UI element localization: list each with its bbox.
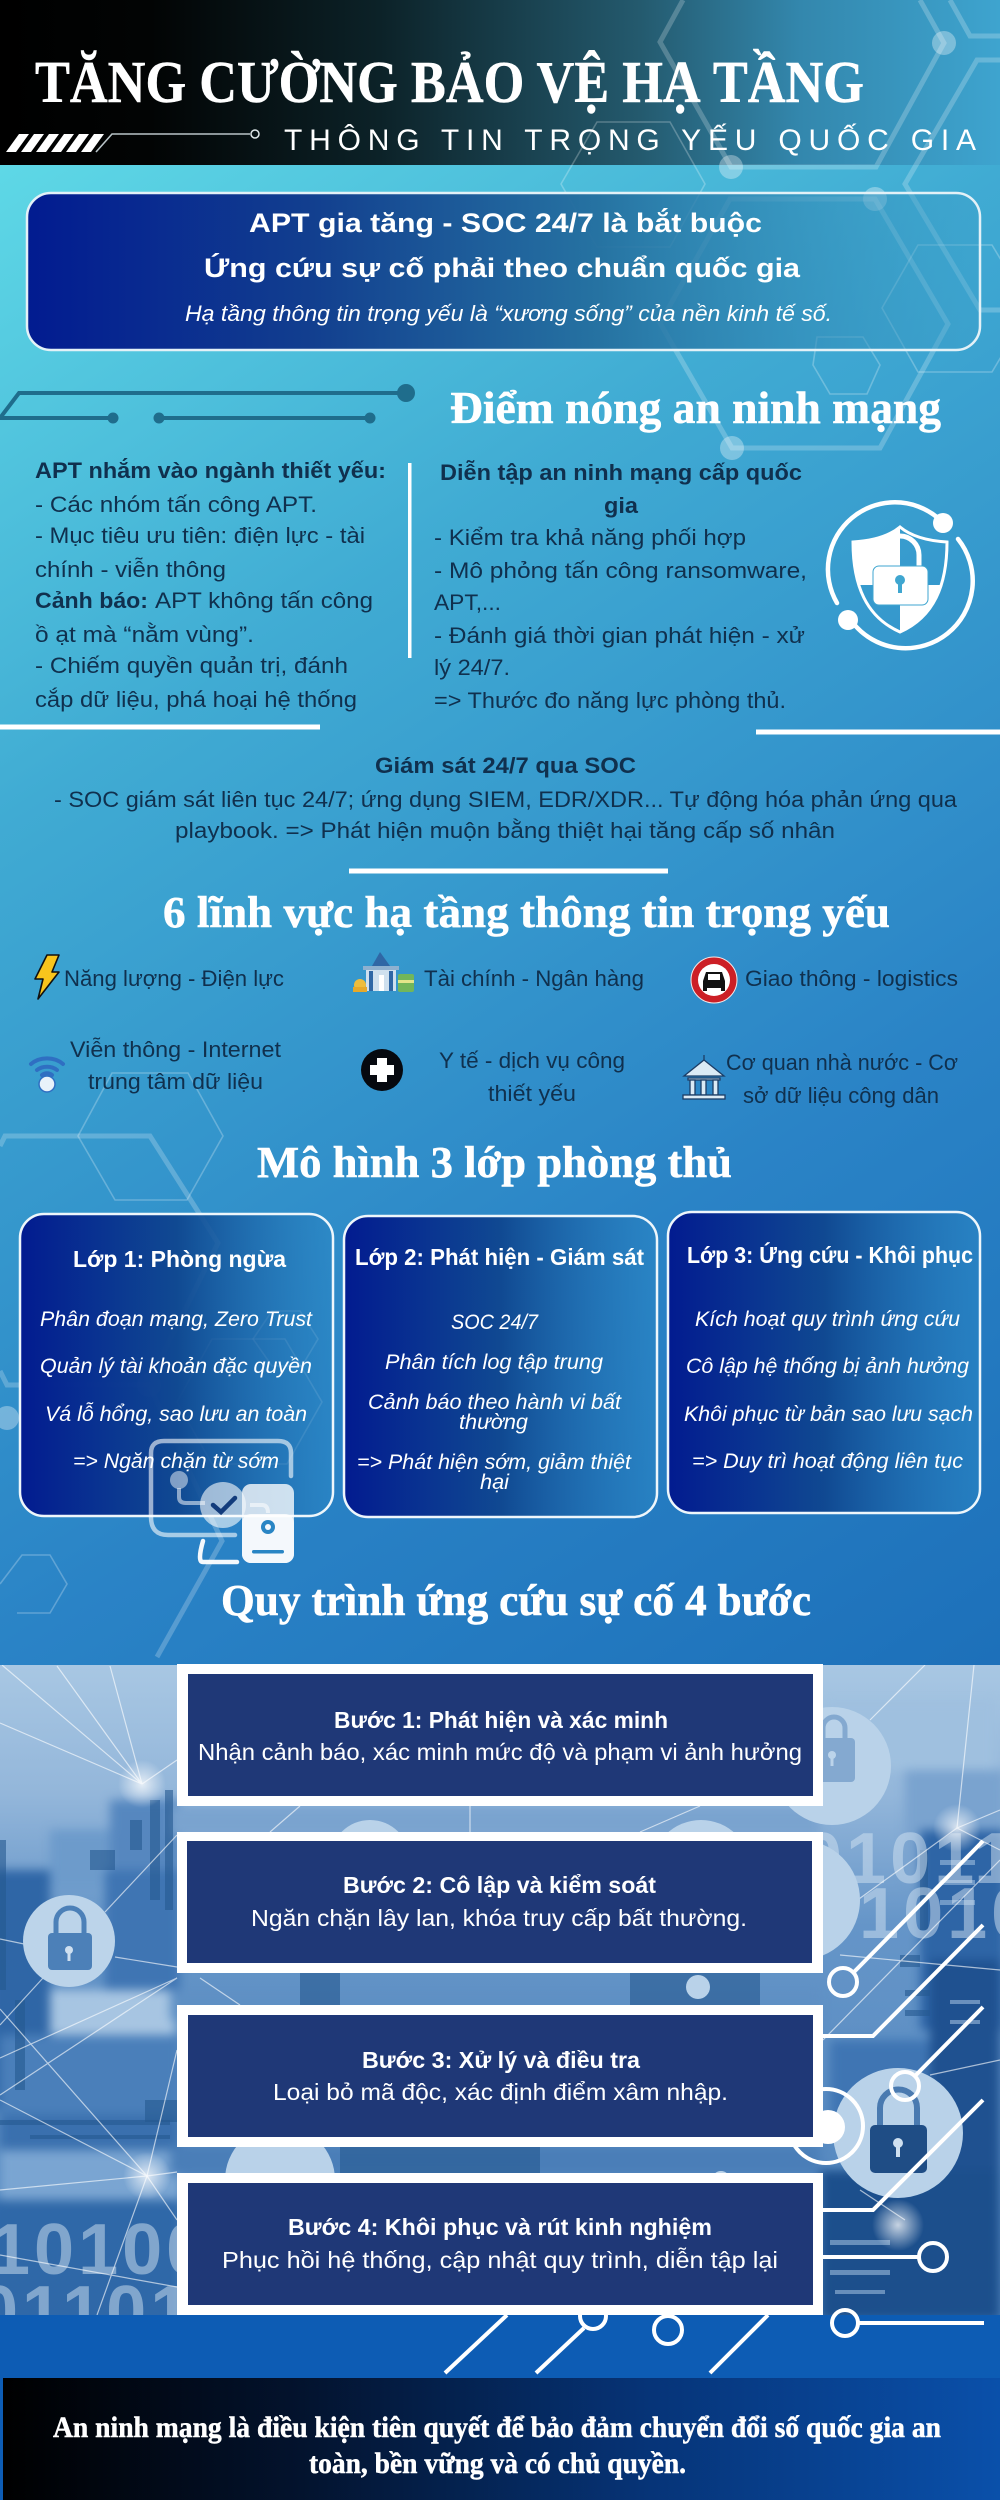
heading: 3-layer model: Mô hình 3 lớp phòng thủ [257, 1138, 732, 1187]
photo textures [0, 1790, 930, 2173]
icon: medical cross [361, 1049, 403, 1091]
sector: telecom: trung tâm dữ liệu [88, 1069, 263, 1094]
text block: national drill: - Đánh giá thời gian phát hiện - xử [434, 623, 805, 648]
sector: finance: Tài chính - Ngân hàng [424, 966, 644, 991]
text block: national drill: APT,... [434, 590, 501, 615]
step 2 [177, 1832, 823, 1973]
text block: APT: - Chiếm quyền quản trị, đánh [35, 653, 348, 678]
icon: lightning bolt [35, 955, 59, 999]
panel: layer 3: Khôi phục từ bản sao lưu sạch [684, 1403, 973, 1426]
heading: hotspots: Điểm nóng an ninh mạng [450, 382, 941, 433]
icon: wifi and globe [31, 1058, 63, 1092]
panel: layer 2: Lớp 2: Phát hiện - Giám sát [355, 1244, 644, 1270]
photo lock top right [823, 1714, 855, 1782]
step 1: Nhận cảnh báo, xác minh mức độ và phạm vi ảnh hưởng [198, 1739, 802, 1765]
background hexagon network: top right [561, 0, 1000, 460]
step 3: Bước 3: Xử lý và điều tra [362, 2047, 640, 2073]
text block: SOC monitoring [54, 753, 958, 843]
header subtitle: THÔNG TIN TRỌNG YẾU QUỐC GIA [284, 123, 976, 157]
sector: government [683, 1050, 958, 1108]
text block: APT: - Các nhóm tấn công APT. [35, 492, 317, 517]
text block: APT: Cảnh báo: [35, 588, 148, 613]
panel: layer 3: Kích hoạt quy trình ứng cứu [695, 1308, 960, 1331]
sector: government: sở dữ liệu công dân [743, 1083, 939, 1108]
step 3: Loại bỏ mã độc, xác định điểm xâm nhập. [273, 2079, 728, 2105]
panel: layer 3: Lớp 3: Ứng cứu - Khôi phục [687, 1241, 973, 1268]
text block: national drill: Diễn tập an ninh mạng cấp quốc [440, 460, 802, 485]
step 4 [177, 2173, 823, 2315]
text block: national drill: - Kiểm tra khả năng phối hợp [434, 525, 746, 550]
lower blue band [0, 2315, 1000, 2500]
footer banner: An ninh mạng là điều kiện tiên quyết để bảo đảm chuyển đổi số quốc gia an [53, 2411, 941, 2444]
header decoration: stripes and line [6, 130, 259, 152]
panel: layer 1 [20, 1214, 333, 1516]
text block: national drill: - Mô phỏng tấn công ransomware, [434, 558, 807, 583]
text block: APT [35, 458, 386, 712]
panel: layer 2: thường [459, 1411, 528, 1434]
text block: APT: APT không tấn công [155, 588, 373, 613]
panel: layer 2: => Phát hiện sớm, giảm thiệt [357, 1451, 632, 1474]
panel: layer 2: Cảnh báo theo hành vi bất [368, 1391, 622, 1414]
panel: layer 1: Vá lỗ hổng, sao lưu an toàn [45, 1403, 307, 1426]
panel: layer 2: SOC 24/7 [451, 1311, 539, 1334]
intro line 2: Ứng cứu sự cố phải theo chuẩn quốc gia [204, 252, 801, 283]
panel: layer 1: Lớp 1: Phòng ngừa [73, 1246, 286, 1272]
step 1: Bước 1: Phát hiện và xác minh [334, 1707, 668, 1733]
text block: national drill [434, 460, 807, 713]
icon: bank with coins [353, 952, 414, 992]
sector: government: Cơ quan nhà nước - Cơ [726, 1050, 958, 1075]
header title: TĂNG CƯỜNG BẢO VỆ HẠ TẦNG [35, 49, 864, 115]
network lines [0, 1665, 1000, 2315]
footer banner [3, 2378, 1000, 2500]
light blobs [226, 1707, 891, 2173]
footer banner: toàn, bền vững và có chủ quyền. [309, 2447, 686, 2480]
text block: APT: chính - viễn thông [35, 557, 226, 582]
panel: layer 1: Quản lý tài khoản đặc quyền [40, 1355, 312, 1378]
sector: health [361, 1048, 625, 1106]
sector: energy [35, 955, 284, 999]
sector: transport [691, 957, 958, 1003]
intro line 3: Hạ tầng thông tin trọng yếu là “xương sống” của nền kinh tế số. [185, 301, 832, 326]
heading: 6 sectors: 6 lĩnh vực hạ tầng thông tin trọng yếu [163, 888, 890, 937]
icon: shield with lock [828, 502, 973, 648]
blurred photo tones [0, 1768, 1000, 2315]
circuit decoration [0, 384, 415, 424]
sector: health: thiết yếu [488, 1081, 576, 1106]
panel: layer 1: => Ngăn chặn từ sớm [73, 1450, 279, 1473]
sector: transport: Giao thông - logistics [745, 966, 958, 991]
circuit overlay: white lines [445, 1841, 984, 2373]
photo background: cyber security [0, 1665, 1000, 2352]
panel: layer 2 [344, 1216, 657, 1517]
photo lock bottom right [833, 2068, 963, 2198]
background hexagon network: left middle [0, 1073, 322, 1657]
text block: APT: APT nhắm vào ngành thiết yếu: [35, 458, 386, 483]
icon: monitor with check and device [151, 1441, 294, 1563]
panel: layer 3: => Duy trì hoạt động liên tục [692, 1450, 964, 1473]
sector: energy: Năng lượng - Điện lực [64, 966, 284, 991]
step 4: Phục hồi hệ thống, cập nhật quy trình, diễn tập lại [222, 2247, 778, 2273]
header band [0, 0, 1000, 165]
step 1 [177, 1664, 823, 1806]
photo lock left [23, 1895, 115, 1987]
step 4: Bước 4: Khôi phục và rút kinh nghiệm [288, 2214, 712, 2240]
text block: APT: ồ ạt mà “nằm vùng”. [35, 622, 254, 647]
text block: national drill: gia [604, 493, 639, 518]
text block: national drill: lý 24/7. [434, 655, 510, 680]
text block: APT: - Mục tiêu ưu tiên: điện lực - tài [35, 523, 365, 548]
binary digits [0, 1819, 1000, 2352]
sector: health: Y tế - dịch vụ công [439, 1048, 625, 1073]
step 3 [177, 2005, 823, 2147]
text block: national drill: => Thước đo năng lực phòng thủ. [434, 688, 786, 713]
intro line 1: APT gia tăng - SOC 24/7 là bắt buộc [249, 207, 762, 238]
panel: layer 2: Phân tích log tập trung [385, 1351, 603, 1374]
panel: layer 3: Cô lập hệ thống bị ảnh hưởng [686, 1355, 969, 1378]
icon: no-car road sign [691, 957, 737, 1003]
text block: SOC monitoring: Giám sát 24/7 qua SOC [375, 753, 636, 778]
heading: 4-step process: Quy trình ứng cứu sự cố 4 bước [221, 1576, 811, 1625]
text block: SOC monitoring: playbook. => Phát hiện muộn bằng thiệt hại tăng cấp số nhân [175, 818, 835, 843]
sector: telecom: Viễn thông - Internet [70, 1037, 281, 1062]
sector: finance [353, 952, 644, 992]
text block: APT: cắp dữ liệu, phá hoại hệ thống [35, 687, 357, 712]
panel: intro message [27, 193, 980, 350]
icon: government building [683, 1055, 725, 1099]
panel: layer 3 [668, 1212, 980, 1513]
text block: SOC monitoring: - SOC giám sát liên tục 24/7; ứng dụng SIEM, EDR/XDR... Tự động hóa phản ứng qua [54, 787, 958, 812]
step 2: Bước 2: Cô lập và kiểm soát [343, 1872, 656, 1898]
panel: layer 1: Phân đoạn mạng, Zero Trust [40, 1308, 313, 1331]
sector: telecom [31, 1037, 281, 1094]
panel: layer 2: hại [480, 1471, 510, 1494]
step 2: Ngăn chặn lây lan, khóa truy cấp bất thường. [251, 1905, 747, 1931]
